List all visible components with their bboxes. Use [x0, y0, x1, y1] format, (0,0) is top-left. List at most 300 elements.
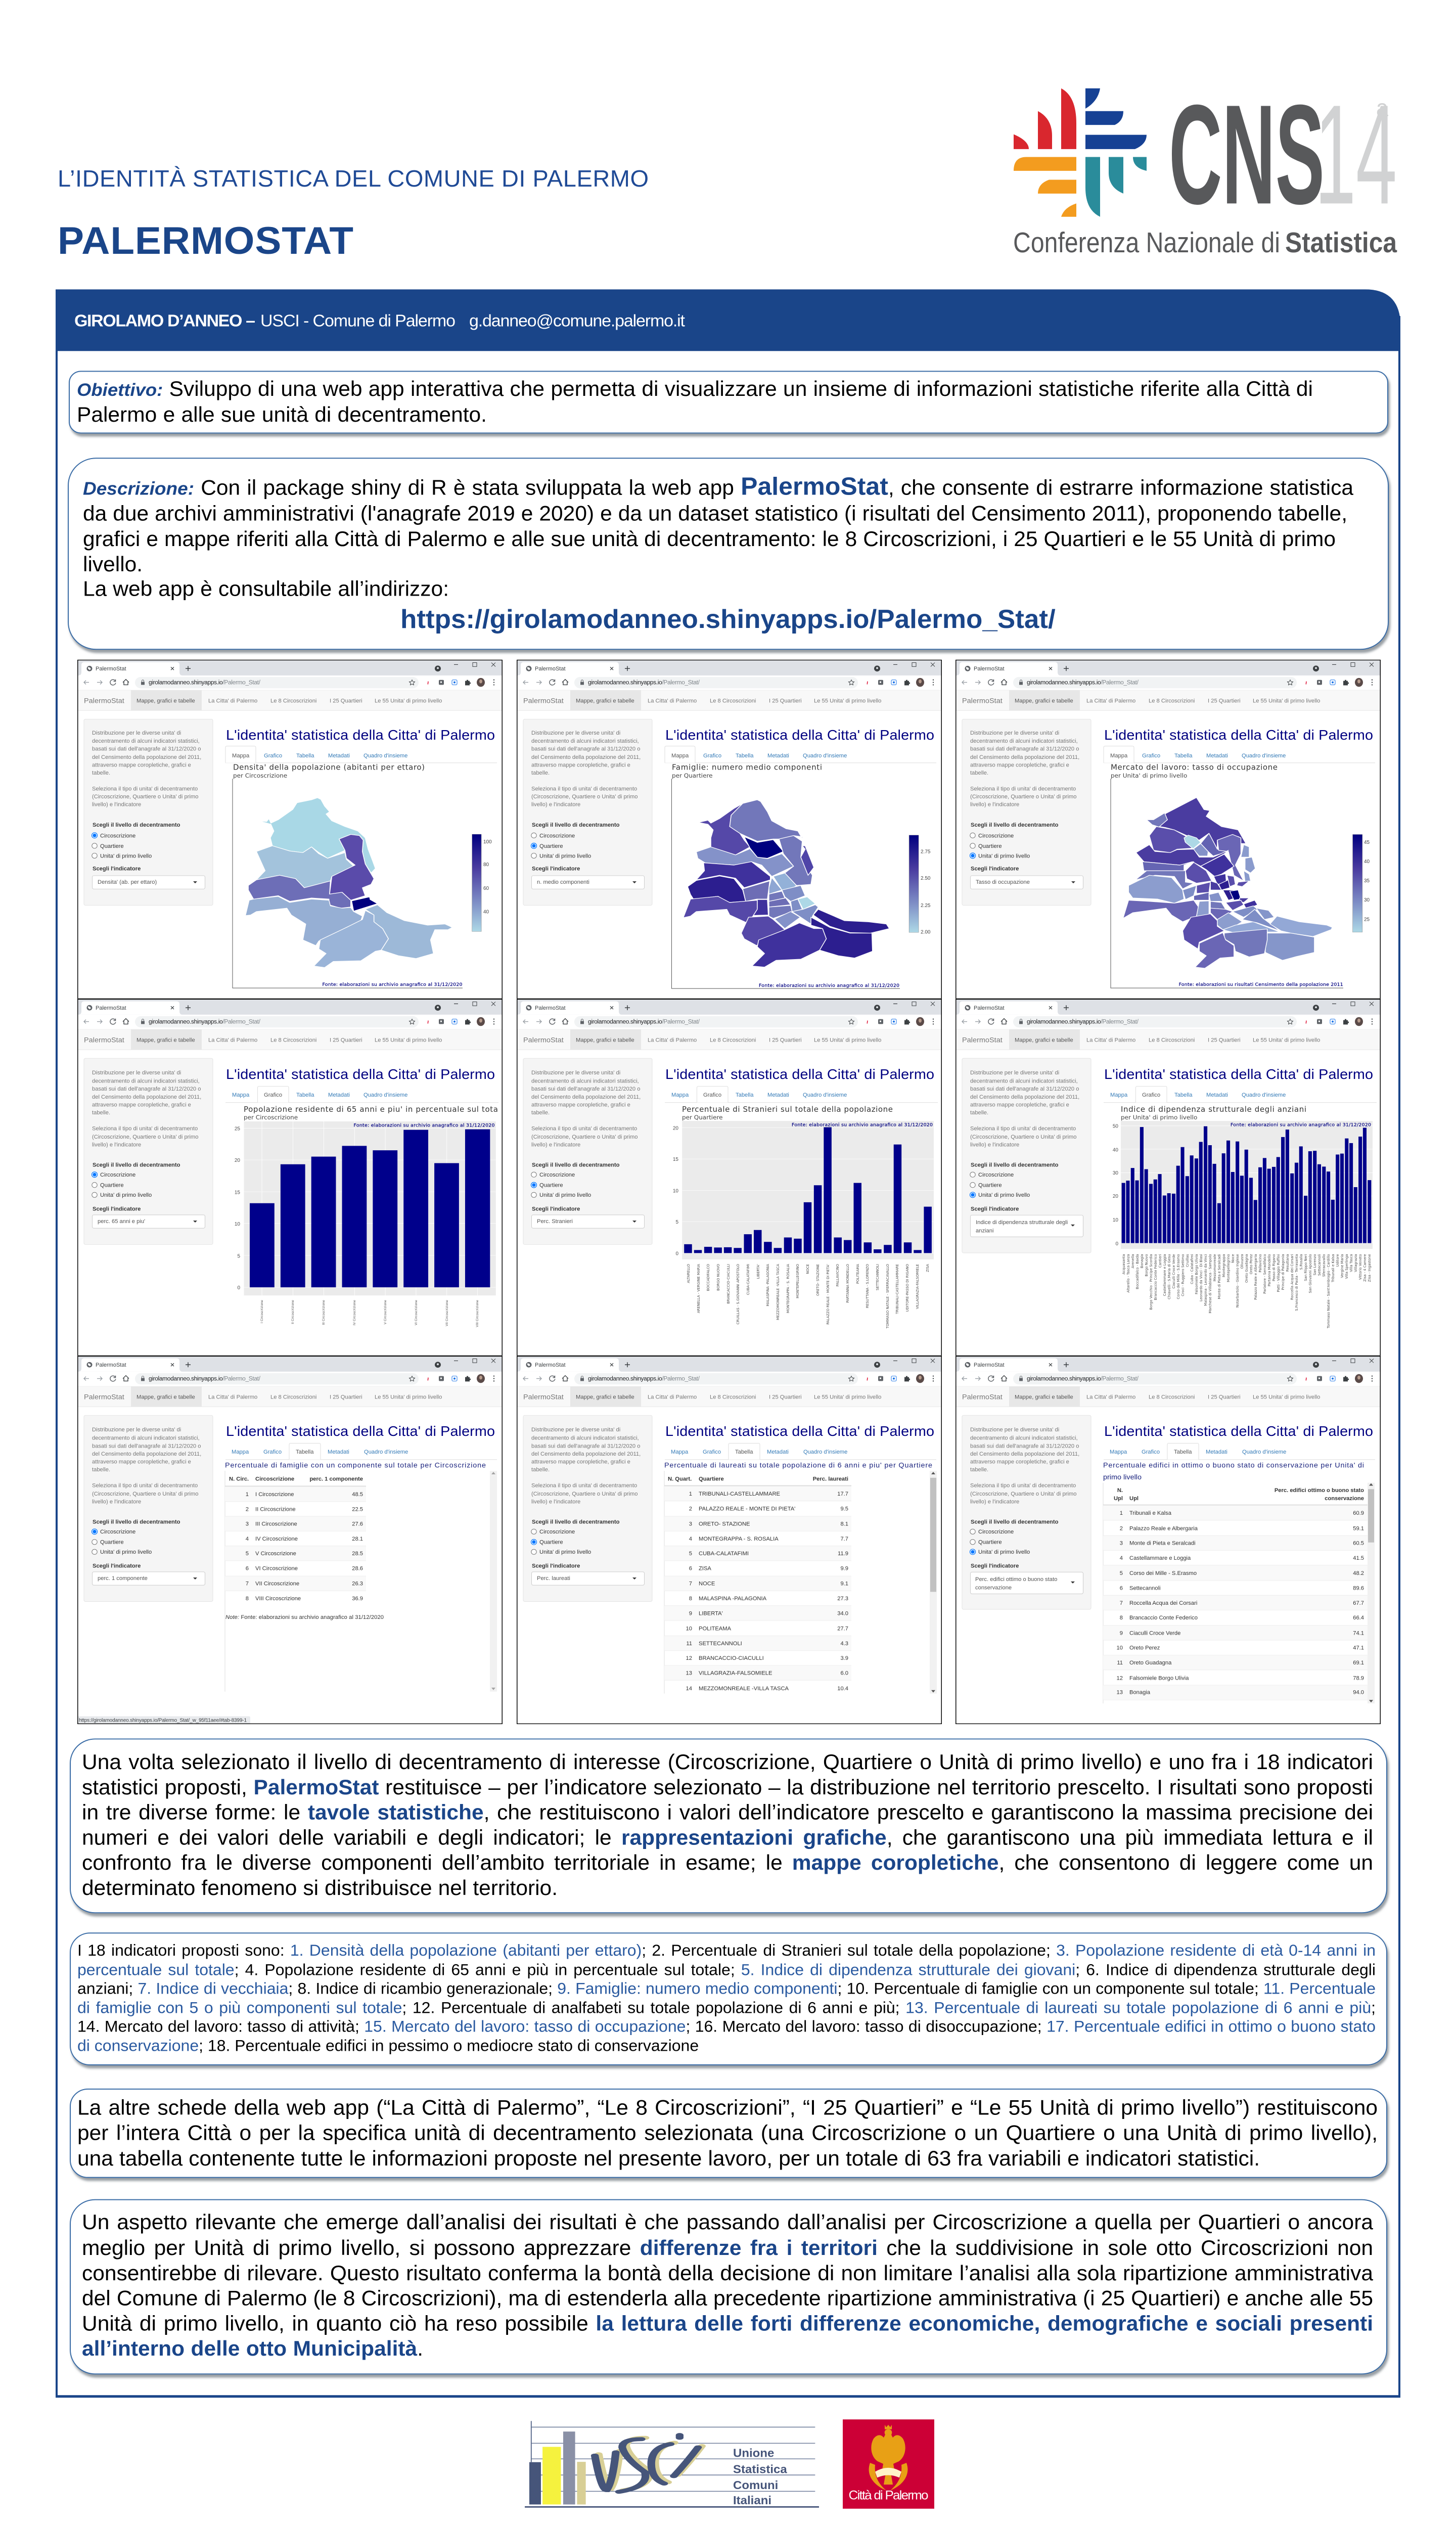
- x axis labels: Ciaculli Croce Verde: [1172, 1254, 1176, 1289]
- data table: VI Circoscrizione: [255, 1566, 298, 1571]
- y axis: 20: [235, 1158, 240, 1163]
- navbar: PalermoStat: [84, 1393, 124, 1401]
- x axis labels: III Circoscrizione: [322, 1300, 326, 1325]
- x axis labels: Tommaso Natale - Sant'Ambrogio - Cardillo: [1327, 1254, 1331, 1329]
- navbar: Mappe, grafici e tabelle: [576, 698, 634, 704]
- x axis labels: Brancaccio Conte Federico: [1154, 1254, 1158, 1300]
- data table: Quartiere: [699, 1476, 724, 1482]
- x axis labels: VIII Circoscrizione: [476, 1300, 479, 1327]
- sidebar: del Censimento della popolazione del 2011,: [970, 1094, 1079, 1100]
- sidebar: livello) e l'indicatore: [92, 802, 141, 808]
- sidebar: Circoscrizione: [100, 1172, 135, 1178]
- data table: Upl: [1114, 1496, 1123, 1502]
- navbar: Le 55 Unita' di primo livello: [1253, 698, 1320, 704]
- data table: 7: [1120, 1600, 1123, 1606]
- tabs: Mappa: [671, 1092, 689, 1098]
- conclusioni text: Un aspetto rilevante che emerge dall’analisi dei risultati è che passando dall’analisi per Circoscrizione a quella per Quartieri o ancora: [82, 2211, 1373, 2234]
- x axis labels: Malaspina - Leonardo da Vinci: [1204, 1254, 1208, 1306]
- navbar: I 25 Quartieri: [1208, 1037, 1241, 1043]
- subtitle: L’IDENTITÀ STATISTICA DEL COMUNE DI PALERMO: [58, 165, 649, 192]
- sidebar: Distribuzione per le diverse unita' di: [970, 1070, 1059, 1076]
- indicatori text: di famiglie con 5 o più componenti sul totale; 12. Percentuale di analfabeti su totale popolazione di 6 anni e più; 13. Percentuale di laureati su totale popolazione di 6 anni e più;: [77, 1999, 1376, 2016]
- altre schede text: una tabella contenente tutte le informazioni proposte nel presente lavoro, per un totale di 63 fra variabili e indicatori statistici.: [77, 2147, 1260, 2171]
- browser tab and url: girolamodanneo.shinyapps.io/Palermo_Stat/: [149, 679, 261, 686]
- screenshot 4: grafico circoscrizione: [77, 999, 503, 1356]
- x axis labels: PALLAVICINO: [836, 1264, 840, 1286]
- data table: 5: [689, 1551, 692, 1557]
- x axis labels: Leonardo da Vinci - Di Blasi: [1199, 1254, 1203, 1301]
- data table: SETTECANNOLI: [699, 1641, 742, 1647]
- app title: L'identita' statistica della Citta' di Palermo: [226, 727, 495, 743]
- x axis labels: TOMMASO NATALE - SFERRACAVALLO: [886, 1264, 890, 1329]
- x axis labels: Resuttana: [1286, 1254, 1290, 1272]
- sidebar: del Censimento della popolazione del 2011,: [531, 754, 641, 760]
- sidebar: Circoscrizione: [978, 833, 1014, 839]
- sidebar: [962, 1058, 1091, 1253]
- tabs: Quadro d'insieme: [803, 1092, 847, 1098]
- sidebar: Quartiere: [100, 1540, 124, 1546]
- data table: 34.0: [837, 1611, 848, 1616]
- navbar: La Citta' di Palermo: [648, 1037, 697, 1043]
- data table: 8: [246, 1596, 249, 1602]
- x axis labels: VII Circoscrizione: [445, 1300, 449, 1326]
- navbar: I 25 Quartieri: [769, 1394, 802, 1401]
- risultati text: numeri e dei valori delle variabili e degli indicatori; le rappresentazioni grafiche, che garantiscono una più immediata lettura e il: [82, 1826, 1373, 1849]
- x axis labels: VILLAGRAZIA-FALSOMIELE: [916, 1264, 920, 1309]
- sidebar: decentramento di alcuni indicatori statistici,: [970, 1435, 1078, 1441]
- sidebar: Unita' di primo livello: [978, 1549, 1030, 1555]
- sidebar: Seleziona il tipo di unita' di decentramento: [970, 786, 1076, 792]
- data table: [225, 1471, 497, 1692]
- x axis labels: Oreto Perez: [1249, 1254, 1253, 1274]
- sidebar: tabelle.: [970, 1110, 988, 1116]
- table title: Percentuale di famiglie con un componente sul totale per Circoscrizione: [225, 1462, 486, 1469]
- data table: [664, 1471, 937, 1694]
- tabs: [665, 746, 936, 763]
- data table: II Circoscrizione: [255, 1506, 296, 1512]
- altre schede text: La altre schede della web app (“La Città di Palermo”, “Le 8 Circoscrizioni”, “I 25 Quartieri” e “Le 55 Unità di primo livello”) restituiscono: [77, 2096, 1378, 2119]
- x axis labels: Monte di Pieta e Seralcadi: [1217, 1254, 1221, 1299]
- screenshot 5: grafico quartiere: [517, 999, 942, 1356]
- sidebar: Scegli il livello di decentramento: [532, 1519, 620, 1525]
- tabs: Metadati: [328, 1449, 349, 1455]
- data table: 60.9: [1353, 1510, 1364, 1516]
- status bar: https://girolamodanneo.shinyapps.io/Palermo_Stat/_w_95f11aee/#tab-8399-1: [79, 1718, 247, 1723]
- y axis: 15: [673, 1157, 678, 1162]
- sidebar: basati sui dati dell'anagrafe al 31/12/2020 o: [531, 1086, 640, 1092]
- data table: 7: [246, 1581, 249, 1587]
- legend: 25: [1364, 917, 1370, 922]
- descrizione text: Descrizione: Con il package shiny di R è stata sviluppata la web app PalermoStat, che consente di estrarre informazione statistica: [83, 473, 1353, 500]
- data table: 6: [689, 1566, 692, 1571]
- map title: Mercato del lavoro: tasso di occupazione: [1111, 763, 1278, 772]
- legend: 2.25: [921, 903, 931, 909]
- sidebar: livello) e l'indicatore: [970, 1499, 1019, 1505]
- tabs: Mappa: [232, 753, 250, 759]
- sidebar: [531, 1427, 641, 1582]
- x axis labels: Passo di Rigano: [1272, 1254, 1276, 1281]
- sidebar: Quartiere: [539, 843, 563, 849]
- data table: 41.5: [1353, 1555, 1364, 1561]
- chart title: Percentuale di Stranieri sul totale della popolazione: [682, 1105, 893, 1114]
- sidebar: livello) e l'indicatore: [970, 1142, 1019, 1148]
- data table: Roccella Acqua dei Corsari: [1129, 1600, 1197, 1606]
- legend: 40: [483, 910, 489, 915]
- navbar: [962, 697, 1320, 705]
- app title: L'identita' statistica della Citta' di Palermo: [665, 1423, 934, 1439]
- tabs: Mappa: [1110, 753, 1128, 759]
- browser tab and url: PalermoStat: [535, 1362, 566, 1368]
- source: Fonte: elaborazioni su archivio anagrafico al 31/12/2020: [792, 1122, 933, 1127]
- tabs: Tabella: [296, 1092, 314, 1098]
- x axis labels: San Lorenzo: [1313, 1254, 1317, 1275]
- legend: [483, 839, 492, 915]
- tabs: [225, 1086, 498, 1103]
- browser tab and url: [535, 666, 700, 686]
- sidebar: Circoscrizione: [539, 1172, 575, 1178]
- indicatori text: I 18 indicatori proposti sono: 1. Densità della popolazione (abitanti per ettaro); 2. Percentuale di Stranieri sul totale della popolazione; 3. Popolazione residente di età 0-14 anni in: [77, 1942, 1376, 1959]
- app title: L'identita' statistica della Citta' di Palermo: [226, 1066, 495, 1082]
- sidebar: Unita' di primo livello: [978, 853, 1030, 859]
- tabs: Grafico: [1142, 1449, 1160, 1455]
- sidebar: basati sui dati dell'anagrafe al 31/12/2020 o: [92, 1443, 201, 1449]
- navbar: La Citta' di Palermo: [1086, 1037, 1135, 1043]
- table title: Percentuale di laureati su totale popolazione di 6 anni e piu' per Quartiere: [664, 1462, 932, 1469]
- sidebar: attraverso mappe coropletiche, grafici e: [531, 1102, 630, 1108]
- panel: descrizione: [68, 458, 1392, 654]
- navbar: Mappe, grafici e tabelle: [576, 1394, 634, 1401]
- navbar: Mappe, grafici e tabelle: [136, 1394, 195, 1401]
- x axis labels: Castellammare e Loggia: [1163, 1254, 1167, 1296]
- browser tab and url: [96, 1005, 261, 1025]
- y axis: 5: [675, 1220, 678, 1225]
- x axis labels: Montepellegrino: [1226, 1254, 1231, 1282]
- sidebar: Distribuzione per le diverse unita' di: [92, 1427, 181, 1433]
- navbar: I 25 Quartieri: [1208, 1394, 1241, 1401]
- navbar: Le 55 Unita' di primo livello: [375, 1037, 442, 1043]
- sidebar: tabelle.: [531, 1467, 550, 1473]
- x axis labels: Marchese di Villabianca - Sampolo: [1208, 1254, 1212, 1314]
- data table: 22.5: [352, 1506, 363, 1512]
- data table: Settecannoli: [1129, 1586, 1161, 1591]
- legend: 30: [1364, 897, 1370, 903]
- x axis labels: UDITORE-PASSO DI RIGANO: [905, 1264, 909, 1312]
- sidebar: Perc. edifici ottimo o buono stato: [975, 1576, 1057, 1583]
- panel: risultati: [0, 1733, 1456, 1921]
- x axis labels: NOCE: [806, 1264, 810, 1274]
- tabs: [1104, 1086, 1377, 1103]
- sidebar: Seleziona il tipo di unita' di decentramento: [531, 1126, 637, 1132]
- x axis labels: MEZZOMONREALE -VILLA TASCA: [776, 1264, 780, 1320]
- browser tab and url: [96, 666, 261, 686]
- sidebar: decentramento di alcuni indicatori statistici,: [531, 1435, 639, 1441]
- sidebar: [92, 1427, 201, 1582]
- data table: 28.5: [352, 1551, 363, 1557]
- x axis labels: Villagrazia: [1354, 1254, 1358, 1272]
- sidebar: Quartiere: [978, 1540, 1002, 1546]
- sidebar: attraverso mappe coropletiche, grafici e: [92, 762, 191, 769]
- sidebar: perc. 1 componente: [98, 1575, 148, 1582]
- risultati text: [82, 1750, 1373, 1904]
- browser tab and url: girolamodanneo.shinyapps.io/Palermo_Stat/: [588, 679, 700, 686]
- sidebar: livello) e l'indicatore: [531, 802, 580, 808]
- logo: USCI: [480, 2400, 834, 2518]
- data table: 78.9: [1353, 1675, 1364, 1681]
- sidebar: Distribuzione per le diverse unita' di: [92, 1070, 181, 1076]
- browser tab and url: PalermoStat: [974, 1362, 1005, 1368]
- navbar: Mappe, grafici e tabelle: [576, 1037, 634, 1043]
- data table: Castellammare e Loggia: [1129, 1555, 1191, 1561]
- conclusioni text: Unità di primo livello, in quanto ciò ha reso possibile la lettura delle forti differenze economiche, demografiche e sociali presenti: [82, 2312, 1373, 2335]
- obiettivo text: Obiettivo: Sviluppo di una web app interattiva che permetta di visualizzare un insieme di informazioni statistiche riferite alla Città di: [77, 378, 1313, 401]
- data table: 66.4: [1353, 1615, 1364, 1621]
- data table: 11: [1117, 1660, 1123, 1666]
- data table: 67.7: [1353, 1600, 1364, 1606]
- sidebar: livello) e l'indicatore: [92, 1142, 141, 1148]
- data table: 17.7: [837, 1491, 848, 1497]
- navbar: Le 8 Circoscrizioni: [710, 698, 756, 704]
- x axis labels: Falsomiele Borgo Ulivia: [1195, 1254, 1199, 1294]
- sidebar: tabelle.: [531, 1110, 550, 1116]
- sidebar: [92, 730, 201, 885]
- x axis labels: Sferracavallo: [1322, 1254, 1326, 1277]
- x axis labels: Montegrappa: [1222, 1254, 1226, 1277]
- navbar: [523, 697, 881, 705]
- logo: CNS 14a Conferenza Nazionale di Statistica: Conferenza Nazionale di: [1013, 227, 1280, 259]
- sidebar: Seleziona il tipo di unita' di decentramento: [970, 1483, 1076, 1488]
- sidebar: Circoscrizione: [100, 833, 135, 839]
- x axis labels: Acquasanta: [1122, 1254, 1126, 1275]
- data table: Corso dei Mille - S.Erasmo: [1129, 1570, 1197, 1576]
- screenshot 3: mappa unita di primo livello: [956, 660, 1381, 999]
- navbar: La Citta' di Palermo: [208, 1394, 257, 1401]
- sidebar: Distribuzione per le diverse unita' di: [92, 730, 181, 736]
- chart title: [1121, 1105, 1306, 1121]
- chart title: Popolazione residente di 65 anni e piu' in percentuale sul tota: [244, 1105, 498, 1114]
- sidebar: Quartiere: [978, 843, 1002, 849]
- tabs: Metadati: [1206, 1449, 1227, 1455]
- browser tab and url: [974, 1005, 1139, 1025]
- navbar: PalermoStat: [523, 1036, 564, 1044]
- sidebar: (Circoscrizione, Quartiere o Unita' di primo: [92, 1491, 198, 1497]
- app title: L'identita' statistica della Citta' di Palermo: [665, 727, 934, 743]
- altre schede text: per l’intera Città o per la specifica unità di decentramento selezionata (una Circoscrizione o un Quartiere o una Unità di primo livello),: [77, 2121, 1378, 2145]
- x axis labels: PARTANNA MONDELLO: [846, 1264, 850, 1303]
- x axis labels: Partanna Mondello: [1267, 1254, 1271, 1286]
- y axis: 10: [235, 1222, 240, 1227]
- conclusioni text: [82, 2210, 1373, 2369]
- x axis labels: MONTEPELLEGRINO: [796, 1264, 800, 1298]
- table title: [1103, 1462, 1364, 1481]
- sidebar: [531, 730, 641, 885]
- x axis labels: CUBA-CALATAFIMI: [746, 1264, 750, 1295]
- indicatori text: anziani; 7. Indice di vecchiaia; 8. Indice di ricambio generazionale; 9. Famiglie: numero medio componenti; 10. Percentuale di famiglie con un componente sul totale; 11. Percentuale: [77, 1979, 1376, 1997]
- sidebar: tabelle.: [92, 1110, 110, 1116]
- data table: 4: [1120, 1555, 1123, 1561]
- x axis labels: TRIBUNALI-CASTELLAMMARE: [895, 1264, 899, 1315]
- x axis labels: Tribunali e Kalsa: [1331, 1254, 1335, 1283]
- tabs: Mappa: [671, 753, 689, 759]
- tabs: Tabella: [1174, 1092, 1193, 1098]
- x axis labels: SETTECANNOLI: [876, 1264, 880, 1290]
- navbar: Le 55 Unita' di primo livello: [375, 1394, 442, 1401]
- url: https://girolamodanneo.shinyapps.io/Palermo_Stat/: [400, 605, 1056, 634]
- sidebar: tabelle.: [531, 770, 550, 776]
- x axis labels: PALAZZO REALE - MONTE DI PIETA': [826, 1264, 830, 1325]
- data table: 28.6: [352, 1566, 363, 1571]
- panel: 18 indicatori: [0, 1926, 1456, 2074]
- x axis labels: [260, 1300, 479, 1327]
- browser tab and url: girolamodanneo.shinyapps.io/Palermo_Stat/: [1027, 1375, 1139, 1382]
- sidebar: Densita' (ab. per ettaro): [98, 879, 157, 885]
- y axis: 0: [1115, 1241, 1118, 1247]
- logo: CNS 14a Conferenza Nazionale di Statistica: [1013, 84, 1397, 259]
- browser tab and url: PalermoStat: [535, 666, 566, 672]
- navbar: Le 55 Unita' di primo livello: [814, 1394, 881, 1401]
- panel: conclusioni: [0, 2192, 1456, 2380]
- map title: Densita' della popolazione (abitanti per ettaro): [233, 763, 425, 772]
- tabs: [1104, 746, 1375, 763]
- choropleth map: [671, 779, 919, 988]
- sidebar: Distribuzione per le diverse unita' di: [970, 730, 1059, 736]
- sidebar: Scegli il livello di decentramento: [971, 1519, 1059, 1525]
- y axis: 20: [673, 1126, 678, 1131]
- risultati text: confronto fra le diverse componenti dell’ambito territoriale in esame; le mappe coropletiche, che consentono di leggere come un: [82, 1852, 1373, 1875]
- data table: MALASPINA -PALAGONIA: [699, 1596, 767, 1602]
- data table: N. Circ.: [229, 1476, 249, 1482]
- logo: Città di Palermo: [843, 2419, 934, 2509]
- navbar: I 25 Quartieri: [330, 1037, 362, 1043]
- data table: Tribunali e Kalsa: [1129, 1510, 1172, 1516]
- sidebar: Scegli il livello di decentramento: [93, 1162, 180, 1168]
- tabs: Metadati: [328, 1092, 350, 1098]
- sidebar: attraverso mappe coropletiche, grafici e: [531, 762, 630, 769]
- x axis labels: [1122, 1254, 1372, 1329]
- y axis: 50: [1113, 1124, 1118, 1129]
- browser tab and url: PalermoStat: [96, 666, 126, 672]
- data table: 11.9: [838, 1551, 848, 1557]
- data table: Monte di Pieta e Seralcadi: [1129, 1541, 1196, 1547]
- sidebar: Scegli l'indicatore: [971, 1206, 1019, 1212]
- x axis labels: BORGO NUOVO: [716, 1264, 720, 1291]
- browser tab and url: girolamodanneo.shinyapps.io/Palermo_Stat/: [149, 1375, 261, 1382]
- source: Fonte: elaborazioni su risultati Censimento della popolazione 2011: [1179, 982, 1343, 987]
- bar chart: [244, 1121, 496, 1295]
- data table: 10: [686, 1626, 692, 1632]
- x axis labels: Olivuzza: [1240, 1254, 1244, 1269]
- navbar: Mappe, grafici e tabelle: [1015, 1394, 1073, 1401]
- logo: Città di Palermo: Città di Palermo: [848, 2488, 928, 2502]
- sidebar: Indice di dipendenza strutturale degli: [976, 1220, 1068, 1226]
- sidebar: Scegli l'indicatore: [532, 1563, 580, 1569]
- x axis labels: POLITEAMA: [856, 1264, 860, 1284]
- browser tab and url: PalermoStat: [96, 1005, 126, 1011]
- browser tab and url: girolamodanneo.shinyapps.io/Palermo_Stat/: [1027, 1018, 1139, 1025]
- sidebar: Quartiere: [539, 1540, 563, 1546]
- sidebar: Quartiere: [100, 843, 124, 849]
- data table: 3.9: [840, 1655, 848, 1661]
- x axis labels: RESUTTANA - S.LORENZO: [866, 1264, 870, 1308]
- tabs: Metadati: [1206, 1092, 1228, 1098]
- y axis: 40: [1113, 1148, 1118, 1153]
- sidebar: decentramento di alcuni indicatori statistici,: [970, 738, 1078, 744]
- tabs: Quadro d'insieme: [1242, 1092, 1286, 1098]
- x axis labels: CRUILLAS - S.GIOVANNI APOSTOLO: [736, 1264, 740, 1325]
- data table: Falsomiele Borgo Ulivia: [1129, 1675, 1189, 1681]
- sidebar: Scegli il livello di decentramento: [532, 822, 620, 828]
- x axis labels: I Circoscrizione: [260, 1300, 264, 1323]
- x axis labels: Croci - Ruggiero Settimo: [1181, 1254, 1185, 1296]
- sidebar: Seleziona il tipo di unita' di decentramento: [531, 1483, 637, 1488]
- map title: [672, 763, 822, 779]
- sidebar: Circoscrizione: [978, 1172, 1014, 1178]
- data table: VILLAGRAZIA-FALSOMIELE: [699, 1671, 772, 1676]
- legend: 40: [1364, 859, 1370, 865]
- sidebar: (Circoscrizione, Quartiere o Unita' di primo: [531, 794, 638, 800]
- choropleth map: [1111, 779, 1362, 988]
- navbar: PalermoStat: [962, 1393, 1003, 1401]
- sidebar: livello) e l'indicatore: [531, 1499, 580, 1505]
- data table: MEZZOMONREALE -VILLA TASCA: [699, 1686, 789, 1692]
- legend: 80: [483, 862, 489, 868]
- tabs: Grafico: [703, 1092, 721, 1098]
- sidebar: (Circoscrizione, Quartiere o Unita' di primo: [970, 1491, 1076, 1497]
- browser tab and url: [96, 1362, 261, 1382]
- sidebar: Quartiere: [978, 1183, 1002, 1189]
- browser tab and url: PalermoStat: [974, 666, 1005, 672]
- navbar: PalermoStat: [523, 697, 564, 705]
- y axis: [673, 1126, 678, 1256]
- tabs: Tabella: [736, 753, 754, 759]
- data table: 10: [1117, 1645, 1123, 1651]
- sidebar: basati sui dati dell'anagrafe al 31/12/2020 o: [970, 746, 1079, 752]
- navbar: Mappe, grafici e tabelle: [136, 1037, 195, 1043]
- x axis labels: Oreto Guadagna: [1245, 1254, 1249, 1283]
- navbar: [523, 1393, 881, 1401]
- x axis labels: S.Francesco di Paola - Terrasanta: [1295, 1254, 1299, 1311]
- screenshot 7: tabella circoscrizione: [77, 1356, 503, 1724]
- app title: L'identita' statistica della Citta' di Palermo: [1104, 1423, 1373, 1439]
- data table: Ciaculli Croce Verde: [1129, 1631, 1180, 1636]
- data table: 13: [1117, 1690, 1123, 1696]
- sidebar: basati sui dati dell'anagrafe al 31/12/2020 o: [531, 1443, 640, 1449]
- sidebar: (Circoscrizione, Quartiere o Unita' di primo: [531, 1134, 638, 1140]
- data table: 9.9: [840, 1566, 848, 1571]
- sidebar: Perc. Stranieri: [537, 1218, 573, 1225]
- data table: Palazzo Reale e Albergaria: [1129, 1526, 1198, 1531]
- data table: 48.2: [1353, 1570, 1364, 1576]
- legend: 2.00: [921, 930, 931, 935]
- sidebar: Unita' di primo livello: [978, 1192, 1030, 1198]
- data table: 27.7: [837, 1626, 848, 1632]
- sidebar: tabelle.: [970, 770, 988, 776]
- x axis labels: S.Rosalia: [1299, 1254, 1303, 1270]
- data table: 7: [689, 1581, 692, 1587]
- navbar: La Citta' di Palermo: [648, 1394, 697, 1401]
- sidebar: Circoscrizione: [539, 1529, 575, 1535]
- bar chart: [1121, 1121, 1373, 1249]
- navbar: La Citta' di Palermo: [1086, 698, 1135, 704]
- panel: altre schede: [0, 2084, 1456, 2187]
- data table: Circoscrizione: [255, 1476, 294, 1482]
- data table: 3: [1120, 1541, 1123, 1547]
- browser tab and url: girolamodanneo.shinyapps.io/Palermo_Stat/: [588, 1018, 700, 1025]
- x axis labels: Arenella: [1131, 1254, 1135, 1269]
- sidebar: del Censimento della popolazione del 2011,: [92, 1094, 201, 1100]
- data table: Perc. laureati: [813, 1476, 848, 1482]
- y axis: [1113, 1124, 1118, 1247]
- data table: 74.1: [1353, 1631, 1364, 1636]
